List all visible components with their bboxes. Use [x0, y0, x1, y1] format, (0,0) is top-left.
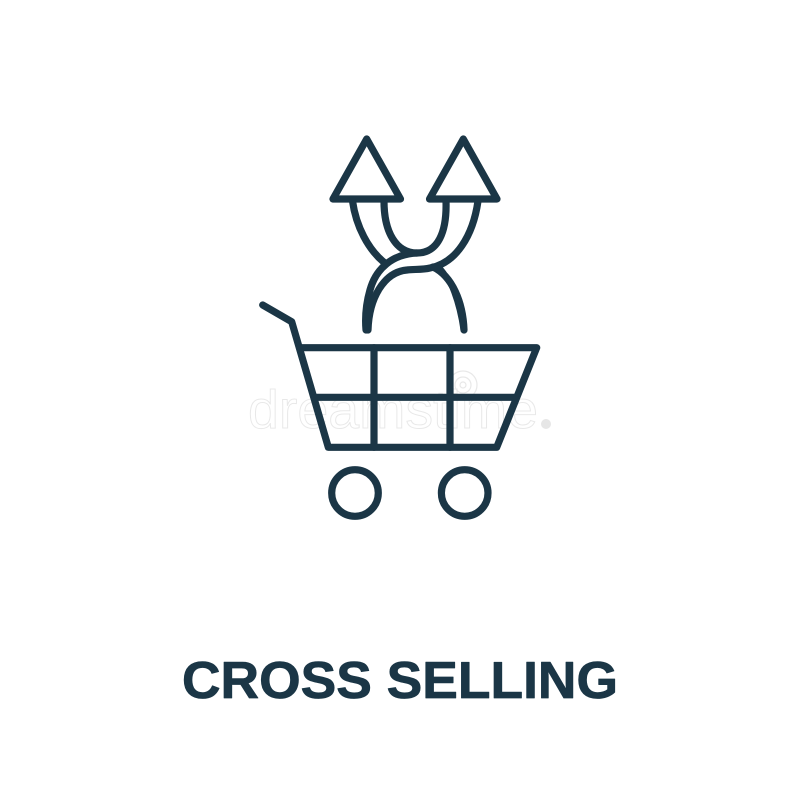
- icon: basket middle rail: [315, 394, 515, 401]
- icon: right wheel: [441, 470, 488, 516]
- icon: left arrow outer stem: [352, 201, 386, 264]
- icon: right arrow outer stem and lower crossing strand: [368, 201, 478, 330]
- icon: lower right inner strand: [440, 268, 463, 330]
- icon: basket right divider: [446, 348, 454, 447]
- watermark dot: [541, 419, 551, 429]
- icon: cross selling cart: [263, 139, 537, 516]
- icon: left arrow head: [333, 139, 400, 199]
- icon: left wheel: [332, 470, 378, 516]
- icon: basket left divider: [370, 348, 378, 447]
- icon: right arrow head: [430, 139, 497, 199]
- watermark text: dreamstime: [248, 380, 538, 440]
- icon: cart handle and basket: [263, 305, 537, 447]
- title: CROSS SELLING: [182, 652, 618, 710]
- icon: lower right strand: [433, 267, 464, 330]
- icon: upper crossing strand: [366, 253, 417, 330]
- watermark: [248, 371, 551, 440]
- watermark spiral: [449, 371, 477, 399]
- icon: inner U stem: [384, 201, 446, 253]
